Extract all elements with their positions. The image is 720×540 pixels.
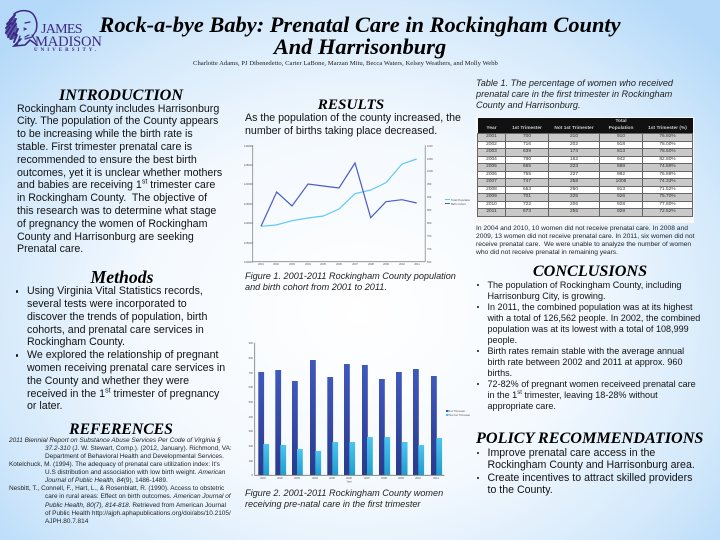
table: prenatal care by year: 225 (570, 194, 578, 199)
x axis labels: 2009 (398, 476, 404, 480)
table: prenatal care by year: 755 (523, 172, 531, 176)
heading: methods: Methods (91, 267, 153, 287)
table: prenatal care by year: 227 (570, 172, 578, 176)
table: prenatal care by year: 2008 (486, 186, 497, 192)
heading: conclusions: CONCLUSIONS (533, 262, 647, 280)
y axis labels: 1000 (427, 169, 433, 173)
x axis labels: 2005 (329, 476, 335, 480)
table: prenatal care by year: 928 (617, 202, 625, 206)
text block: references: U.S distribution and association with low birth weight. American (45, 469, 225, 476)
table: prenatal care by year: 2009 (486, 194, 497, 199)
text block: conclusions list (477, 280, 700, 411)
table: prenatal care by year: 78.00% (659, 142, 676, 146)
table: prenatal care by year: 653 (523, 186, 531, 192)
text block: policy list: Improve prenatal care access in the (488, 447, 655, 459)
table: prenatal care by year: 174 (570, 149, 578, 154)
text block: table note: 2009, 13 women did not receive prenatal care. In 2011, six women did not (476, 233, 694, 240)
text block: results: number of births taking place decreased. (245, 125, 437, 137)
y axis labels: 750 (427, 234, 432, 238)
text block: references: Public Health, 80(7), 814-818. Retrieved from American Journal (45, 502, 226, 508)
legend (445, 198, 471, 206)
y axis labels: 100 (249, 459, 254, 463)
text block: policy list: to the County. (488, 484, 553, 496)
table: prenatal care by year: 74.33% (659, 179, 676, 184)
table: prenatal care by year: 700 (523, 134, 531, 139)
text block: methods list: Using Virginia Vital Statistics records, (27, 285, 203, 297)
caption: table 1: County and Harrisonburg. (476, 100, 580, 110)
x axis labels: 2002 (273, 262, 279, 266)
y axis labels: 500 (249, 400, 254, 404)
x axis labels: 2010 (415, 476, 421, 480)
x axis labels: 2001 (258, 262, 264, 266)
table: prenatal care by year: 82.80% (659, 156, 676, 162)
y axis labels: 600 (249, 385, 254, 389)
text block: conclusions list: In 2011, the combined population was at its highest (488, 302, 693, 312)
table: prenatal care by year: 255 (570, 209, 578, 214)
x axis labels: 2004 (312, 476, 318, 480)
y axis labels: 110000 (244, 221, 253, 225)
text block: conclusions list: population was at its lowest with a total of 108,999 (488, 324, 689, 334)
line chart: population and birth cohort (244, 144, 470, 266)
y axis labels: 300 (249, 429, 254, 433)
table: prenatal care by year: 2003 (486, 149, 497, 154)
table: prenatal care by year: 78.60% (659, 149, 676, 154)
y axis labels: 700 (427, 247, 432, 251)
table: prenatal care by year: 888 (617, 164, 625, 169)
text block: introduction: stable. First trimester prenatal care is (17, 141, 192, 153)
table: prenatal care by year: 639 (523, 149, 531, 154)
y axis labels: 800 (249, 356, 254, 360)
table: prenatal care by year: 74.89% (659, 164, 676, 169)
text block: conclusions list: appropriate care. (488, 400, 556, 410)
table: prenatal care by year: 202 (570, 142, 578, 146)
y axis labels: 900 (427, 195, 432, 199)
table: prenatal care by year: 75.70% (659, 194, 676, 199)
text block: policy list: Rockingham County and Harrisonburg area. (488, 459, 695, 471)
x axis labels: Year (346, 480, 352, 484)
y axis labels: 125000 (244, 163, 253, 167)
y axis labels (249, 341, 254, 477)
logo wordmark MADISON: MADISON (35, 34, 102, 50)
y axis labels: 105000 (244, 241, 253, 245)
table: prenatal care by year: 1st Trimester (512, 126, 542, 131)
table: prenatal care by year: 71.52% (659, 186, 676, 192)
text block: conclusions list: people. (488, 334, 517, 344)
text block: references: Journal of Public Health, 84(9), 1486-1489. (45, 477, 168, 484)
table: prenatal care by year: 260 (570, 186, 578, 192)
y axis labels: 650 (427, 260, 432, 264)
text block: table note: In 2004 and 2010, 10 women did not receive prenatal care. In 2008 and (476, 225, 688, 232)
y axis labels: 1050 (427, 157, 433, 161)
table: prenatal care by year: 928 (617, 209, 625, 214)
table: prenatal care by year: Total (615, 119, 627, 124)
x axis labels: 2006 (336, 262, 342, 266)
text block: results: As the population of the county increased, the (245, 112, 461, 124)
text block: references: 37.2-310 (J. W. Stewart, Comp.). (2012, January). Richmond, VA: (45, 445, 232, 452)
table: prenatal care by year: 210 (570, 134, 578, 139)
x axis labels: 2008 (381, 476, 387, 480)
y axis labels: 100000 (244, 260, 253, 264)
table: prenatal care by year: 77.80% (659, 202, 676, 206)
x axis labels: 2003 (294, 476, 300, 480)
chart axes (255, 343, 444, 475)
table: prenatal care by year: 1005 (616, 179, 626, 184)
table: prenatal care by year: 665 (523, 164, 531, 169)
text block: table note: receive prenatal care. We were unable to analyze the number of women (476, 241, 691, 248)
text block: methods list: Rockingham County. (27, 336, 125, 348)
table: prenatal care by year: 2004 (486, 156, 497, 162)
y axis labels: 0 (252, 473, 254, 477)
table: prenatal care by year: 2010 (486, 202, 497, 206)
text block: methods list: cohorts, and prenatal care services in (27, 324, 204, 336)
logo: James Madison University (5, 10, 102, 53)
text block: methods list: several tests were incorporated to (27, 298, 187, 310)
title: And Harrisonburg (274, 34, 446, 59)
caption: table 1: prenatal care in the first trimester in Rockingham (476, 89, 672, 99)
table: prenatal care by year: 701 (523, 194, 531, 199)
text block: policy list (477, 447, 695, 496)
title (99, 12, 621, 59)
x axis labels: 2004 (305, 262, 311, 266)
x axis labels: 2007 (352, 262, 358, 266)
table: prenatal care by year: 2007 (486, 179, 497, 184)
text block: introduction: outcomes, yet it is unclear whether mothers (17, 167, 222, 179)
logo wordmark UNIVERSITY: UNIVERSITY. (34, 48, 99, 53)
table: prenatal care by year: 982 (617, 172, 625, 176)
x axis labels: 2003 (289, 262, 295, 266)
table: prenatal care by year: 72.52% (659, 209, 676, 214)
caption: figure 2 (245, 488, 443, 509)
caption: figure 1: and birth cohort from 2001 to 2011. (245, 282, 387, 292)
x axis labels: 2011 (414, 262, 420, 266)
bars: 1st trimester (258, 360, 437, 475)
text block: methods list: or later. (27, 400, 62, 412)
table: prenatal care by year: 258 (570, 179, 578, 184)
x axis labels: 2008 (368, 262, 374, 266)
caption: figure 1: Figure 1. 2001-2011 Rockingham County population (245, 270, 456, 280)
table: prenatal care by year: 813 (617, 149, 625, 154)
table: prenatal care by year: 223 (570, 164, 578, 169)
y axis labels: 950 (427, 182, 432, 186)
text block: conclusions list: in the 1st trimester, leaving 18-28% without (488, 389, 658, 400)
text block: references: AJPH.80.7.814 (45, 518, 88, 525)
text block: table note: who did not receive prenatal in remaining years. (476, 249, 618, 256)
line: total population (261, 159, 417, 226)
table: prenatal care by year: Population (609, 126, 633, 131)
x axis labels (260, 476, 439, 484)
y axis labels: 120000 (244, 182, 253, 186)
y axis labels: 130000 (244, 144, 253, 148)
text block: references: Department of Behavioral Health and Developmental Services. (45, 453, 224, 460)
y axis labels: 900 (249, 341, 254, 345)
table: prenatal care by year: 2002 (486, 142, 497, 146)
legend: 1st Trimester (449, 409, 465, 413)
table: prenatal care by year: 162 (570, 156, 578, 162)
text block: conclusions list: Harrisonburg City, is growing. (488, 290, 606, 300)
text block: policy list: Create incentives to attract skilled providers (488, 472, 692, 484)
text block: conclusions list: The population of Rockingham County, including (488, 280, 681, 290)
text block: conclusions list: with a total of 126,562 people. In 2002, the combined (488, 312, 700, 322)
text block: table note (476, 225, 694, 256)
table: prenatal care by year: 747 (523, 179, 531, 184)
y axis labels: 115000 (244, 202, 253, 206)
x axis labels: 2007 (364, 476, 370, 480)
text block: introduction: Prenatal care. (17, 243, 83, 255)
x axis labels: 2010 (399, 262, 405, 266)
table: prenatal care by year: 910 (617, 134, 625, 139)
chart axes (253, 145, 425, 262)
x axis labels: 2005 (320, 262, 326, 266)
text block: introduction: County and Harrisonburg are seeking (17, 231, 194, 243)
heading: policy recommendations: POLICY RECOMMENDATIONS (476, 429, 703, 447)
y axis labels: 800 (427, 221, 432, 225)
heading: introduction: INTRODUCTION (59, 86, 183, 104)
text block: methods list: received in the 1st trimester of pregnancy (27, 387, 219, 400)
text block: introduction: and babies are receiving 1st trimester care (17, 179, 215, 191)
x axis labels: 2006 (346, 476, 352, 480)
legend: Not 1st Trimester (449, 413, 470, 417)
table: prenatal care by year: 913 (617, 186, 625, 192)
text block: references: care in rural areas: Effect on birth outcomes. American Journal of (45, 493, 231, 500)
text block: conclusions list: Birth rates remain stable with the average annual (488, 346, 684, 356)
text block: methods list: We explored the relationship of pregnant (27, 349, 218, 361)
text block: conclusions list: 72-82% of pregnant women receiveed prenatal care (488, 378, 696, 388)
table: prenatal care by year: 716 (523, 142, 531, 146)
text block: introduction: City. The population of the County appears (17, 115, 218, 127)
table: prenatal care by year: Not 1st Trimester (554, 126, 594, 131)
table: prenatal care by year: 942 (617, 156, 625, 162)
text block: references (9, 437, 232, 525)
table: prenatal care by year: 918 (617, 142, 625, 146)
text block: conclusions list: births. (488, 368, 512, 378)
bar chart: women receiving prenatal care (248, 341, 470, 484)
caption: table 1: Table 1. The percentage of women who received (476, 78, 673, 88)
y axis labels: 1100 (427, 144, 433, 148)
logo wordmark JAMES: JAMES (41, 22, 82, 37)
text block: introduction: recommended to ensure the best birth (17, 154, 197, 166)
x axis labels: 2001 (260, 476, 266, 480)
caption: figure 2: receiving pre-natal care in the first trimester (245, 499, 420, 509)
text block: results (245, 112, 461, 137)
x axis labels: 2011 (433, 476, 439, 480)
text block: introduction (17, 103, 222, 255)
text block: introduction: of pregnancy the women of Rockingham (17, 218, 207, 230)
table: prenatal care by year: 2001 (486, 134, 497, 139)
table: prenatal care by year: 2011 (486, 209, 497, 214)
table: prenatal care by year: 1st Trimester (%) (648, 126, 687, 131)
table: prenatal care by year: 926 (617, 194, 625, 199)
caption: figure 2: Figure 2. 2001-2011 Rockingham County women (245, 488, 443, 498)
text block: introduction: in Rockingham County. The objective of (17, 192, 207, 204)
bars: not 1st trimester (263, 437, 442, 475)
text block: introduction: this research was to determine what stage (17, 205, 216, 217)
table: prenatal care by year: 780 (523, 156, 531, 162)
y axis labels: 850 (427, 208, 432, 212)
heading: references: REFERENCES (69, 421, 173, 438)
x axis labels: 2002 (277, 476, 283, 480)
text block: references: 2011 Biennial Report on Substance Abuse Services Per Code of Virginia § (9, 437, 221, 444)
text block: references: Kotelchuck, M. (1994). The adequacy of prenatal care utilization index: It's (9, 461, 220, 468)
table: prenatal care by year: 206 (570, 202, 578, 206)
table: prenatal care by year: 673 (523, 209, 531, 214)
text block: conclusions list: birth rate between 2002 and 2011 at approx. 960 (488, 356, 682, 366)
x axis labels: 2009 (383, 262, 389, 266)
text block: introduction: Rockingham County includes Harrisonburg (17, 103, 219, 115)
table: prenatal care by year: 76.92% (659, 134, 676, 139)
table: prenatal care by year: 2005 (486, 164, 497, 169)
caption: figure 1 (245, 270, 456, 292)
line: birth cohort (261, 163, 417, 226)
table: prenatal care by year (475, 117, 694, 223)
table: prenatal care by year: 76.88% (659, 172, 676, 176)
y axis labels: 400 (249, 415, 254, 419)
y axis labels (244, 144, 433, 264)
text block: methods list: discover the trends of population, birth (27, 311, 207, 323)
text block: methods list: the County and whether they were (27, 375, 189, 387)
text block: references: Nesbitt, T., Connell, F., Hart, L., & Rosenblatt, R. (1990). Access to obstetric (9, 485, 224, 492)
title: Rock-a-bye Baby: Prenatal Care in Rockingham County (99, 12, 621, 37)
icon: Madison portrait (5, 10, 38, 47)
authors: Charlotte Adams, PJ Dibenedetto, Carter LaBone, Marzan Mitu, Becca Waters, Kelsey Weathers, and Molly Webb (193, 60, 498, 67)
legend: Birth Cohort (451, 202, 466, 206)
text block: introduction: to be increasing while the birth rate is (17, 128, 193, 140)
y axis labels: 700 (249, 371, 254, 375)
heading: results: RESULTS (318, 96, 384, 113)
caption: table 1 (476, 78, 674, 110)
text block: methods list (16, 285, 225, 412)
text block: methods list: women receiving prenatal care services in (27, 362, 225, 374)
table: prenatal care by year: 2006 (486, 172, 497, 176)
legend (446, 409, 470, 417)
text block: references: of Public Health http://ajph.aphapublications.org/doi/abs/10.2105/ (45, 510, 231, 517)
x axis labels (258, 262, 420, 266)
table: prenatal care by year: 722 (523, 202, 531, 206)
table: prenatal care by year: Year (486, 126, 497, 131)
y axis labels: 200 (249, 444, 254, 448)
